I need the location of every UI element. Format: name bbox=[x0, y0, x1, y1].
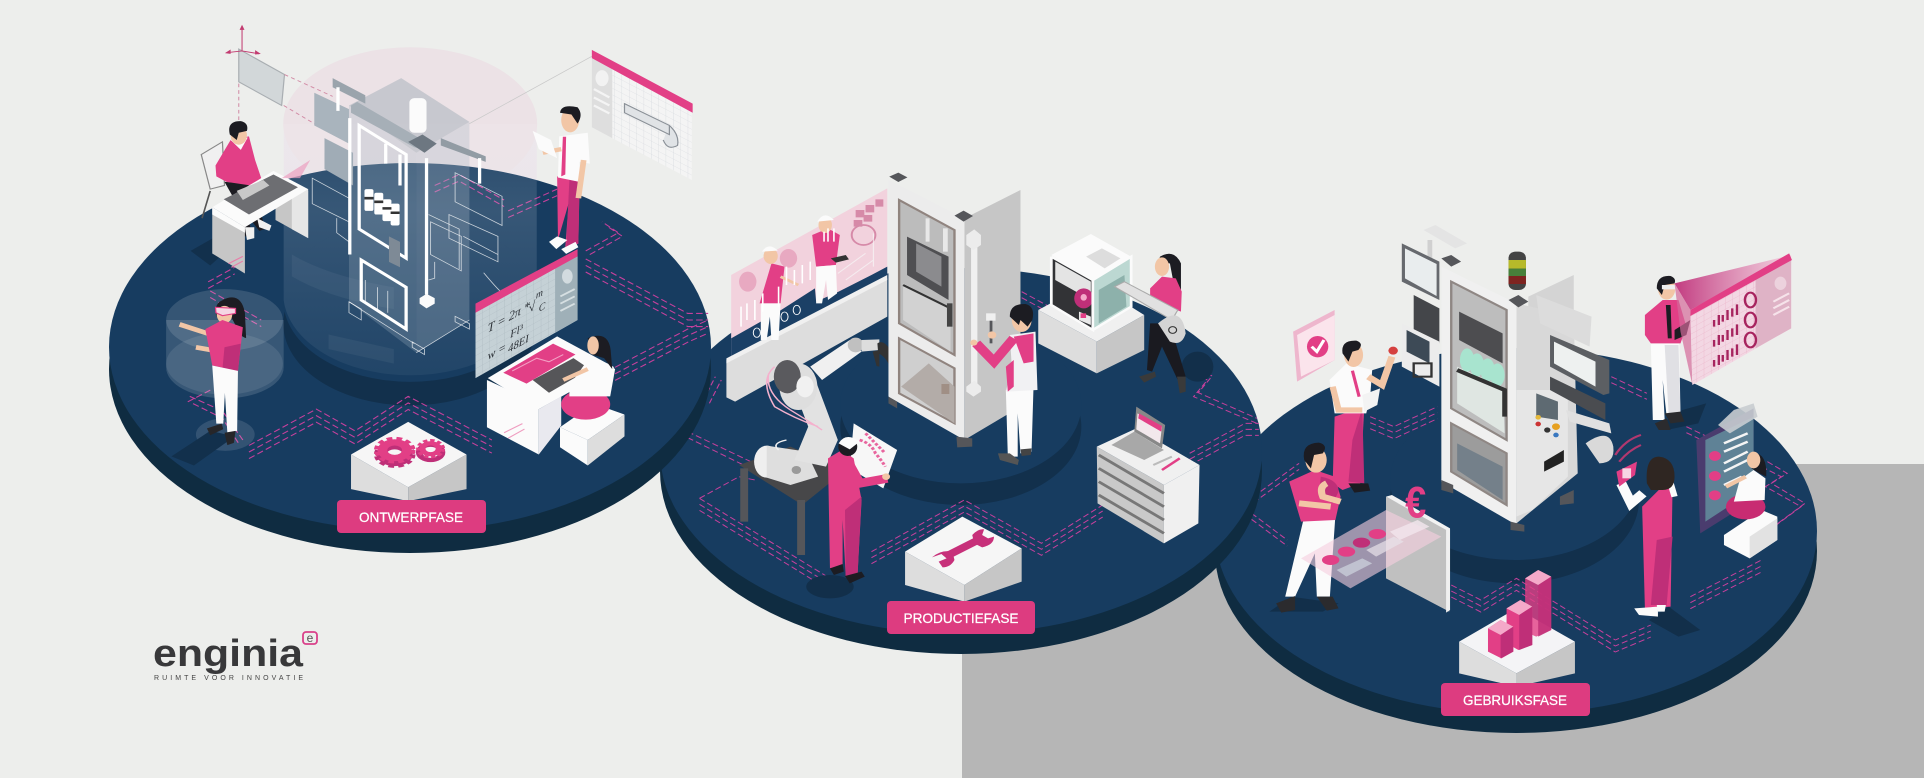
background grey block bbox=[962, 464, 1924, 778]
cabinet machine bbox=[888, 173, 1020, 447]
disk: productiefase bbox=[660, 268, 1262, 654]
disk: ontwerpfase bbox=[109, 163, 711, 553]
circuit lines bbox=[1252, 377, 1805, 652]
panel: gebruiksfase platform bbox=[1215, 225, 1817, 733]
hologram cylinder back bbox=[283, 47, 537, 291]
equation screen bbox=[476, 249, 578, 378]
dashboard screen bbox=[1690, 253, 1792, 385]
text: formulas: C bbox=[539, 300, 546, 315]
tool cart with laptop bbox=[1097, 407, 1200, 543]
label: productiefase: PRODUCTIEFASE bbox=[904, 610, 1018, 626]
circuit lines bbox=[188, 175, 708, 459]
circuit lines bbox=[688, 292, 1259, 590]
inner platform bbox=[840, 327, 1081, 505]
person: man thinking bbox=[1269, 443, 1341, 613]
screen with drawing bbox=[592, 50, 693, 180]
euro display with data sheet bbox=[1301, 476, 1450, 613]
logo: enginia bbox=[153, 631, 317, 682]
panel: ontwerpfase platform bbox=[109, 25, 711, 553]
scene: productiefase bbox=[688, 173, 1259, 602]
text: formulas bbox=[488, 287, 546, 363]
robot arm on table bbox=[739, 338, 897, 555]
machine with stack light bbox=[1402, 225, 1641, 532]
clipboard with checklist bbox=[1696, 403, 1758, 533]
inner platform bbox=[283, 218, 537, 405]
person: woman with VR headset bbox=[166, 289, 284, 465]
person: woman with tablet bbox=[1616, 457, 1700, 637]
label: gebruiksfase: GEBRUIKSFASE bbox=[1463, 692, 1567, 708]
icon: wrench on cube bbox=[905, 517, 1022, 602]
inner platform bbox=[1390, 400, 1639, 583]
person: worker with drawing bbox=[806, 423, 897, 598]
blueprint machine bbox=[312, 78, 502, 355]
scene: ontwerpfase bbox=[166, 25, 708, 501]
label: productiefase bbox=[887, 601, 1035, 634]
ghost component with axes bbox=[225, 25, 592, 135]
logo wordmark: enginia bbox=[153, 633, 304, 675]
person: woman with arm bbox=[1115, 254, 1213, 393]
panel: productiefase platform bbox=[660, 173, 1262, 654]
3D printer bbox=[1038, 234, 1144, 373]
icon: gears on cube bbox=[351, 422, 467, 501]
person: man with paper bbox=[533, 106, 590, 254]
logo tagline: RUIMTE VOOR INNOVATIE bbox=[154, 675, 303, 682]
icon: euro: € bbox=[1405, 476, 1426, 527]
person: mechanic with hammer bbox=[970, 304, 1037, 465]
scene: gebruiksfase bbox=[1252, 225, 1805, 687]
person: seated woman with stool bbox=[1724, 452, 1777, 558]
text: formulas: m bbox=[536, 287, 543, 302]
person: woman at workstation bbox=[487, 336, 624, 465]
icon: check card bbox=[1293, 310, 1335, 382]
text: formulas: √ bbox=[529, 297, 536, 316]
bar chart cube bbox=[1459, 570, 1575, 687]
label: gebruiksfase bbox=[1441, 683, 1590, 716]
display wall with engineers bbox=[726, 188, 887, 402]
label: ontwerpfase: ONTWERPFASE bbox=[359, 509, 463, 525]
person: seated designer at desk bbox=[191, 121, 310, 273]
label: ontwerpfase bbox=[337, 500, 486, 533]
person: man with tablet bbox=[1329, 341, 1398, 493]
text: formulas: w = bbox=[488, 340, 506, 363]
text: formulas: Fl³ bbox=[509, 322, 523, 342]
text: formulas: 48EI bbox=[508, 332, 530, 356]
text: formulas: T = 2π * bbox=[488, 298, 530, 336]
person: engineer right bbox=[812, 215, 849, 303]
logo exponent bbox=[303, 631, 317, 645]
person: man with VR glasses bbox=[1645, 255, 1791, 430]
logo exponent: e bbox=[307, 631, 314, 645]
cylinder hologram bbox=[284, 124, 537, 375]
disk: gebruiksfase bbox=[1215, 348, 1817, 733]
person: engineer left bbox=[760, 246, 798, 340]
